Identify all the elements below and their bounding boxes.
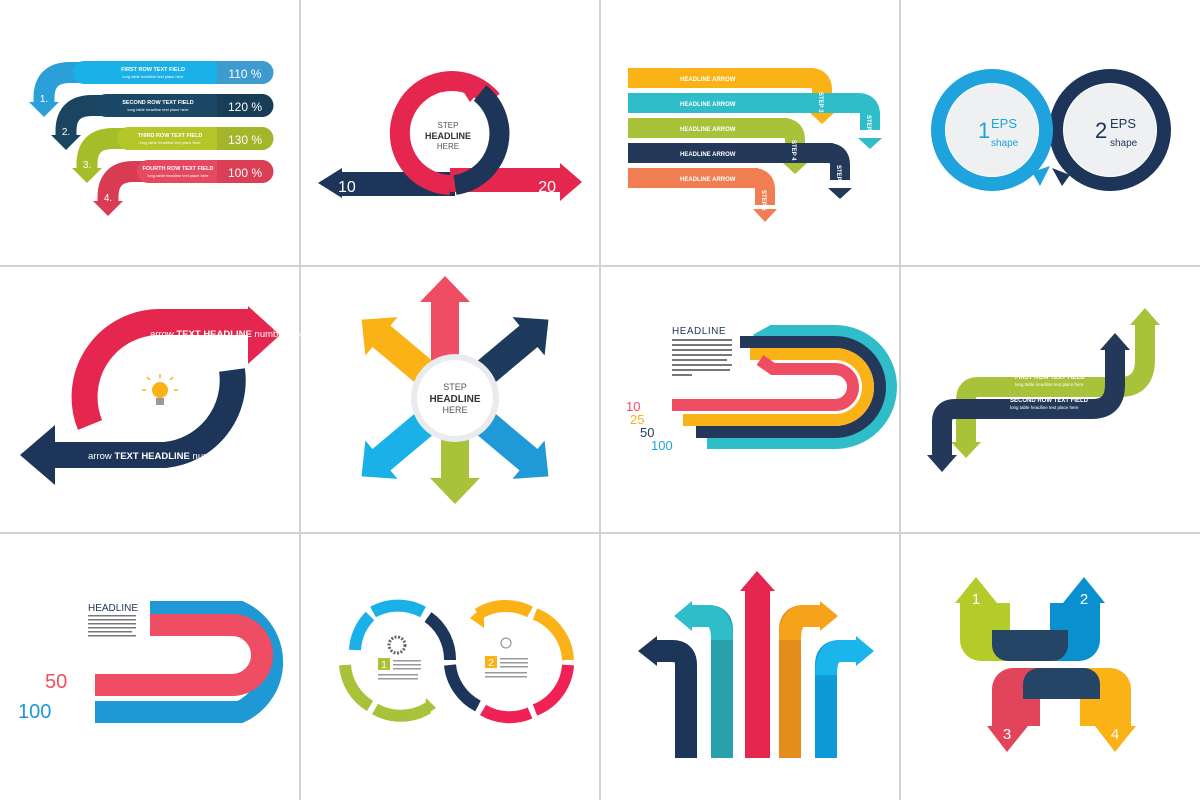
panel: nested U arrows with headline [626,326,891,453]
panel: headline arrows with steps: STEP 1 [865,115,871,136]
row 1: 1. [40,94,48,105]
panel: radial arrows: HEADLINE [429,394,481,405]
panel: two circles EPS: shape [991,138,1019,149]
arrow bar teal [628,93,882,149]
panel: four numbered U arrows [955,577,1136,752]
row 4 [93,160,274,216]
row 4: 4. [104,193,112,204]
panel: four numbered U arrows: 4 [1111,726,1119,743]
panel: single U arrow with headline: 50 [45,671,67,693]
panel: infinity segmented circles: 1 [381,660,387,671]
panel: infinity segmented circles: 2 [488,658,494,669]
panel: two circles EPS: shape [1110,138,1138,149]
panel: headline arrows with steps: STEP 2 [835,165,841,186]
arrow bar orange [628,168,777,222]
panel: four numbered U arrows: 2 [1080,591,1088,608]
panel: four numbered U arrows: 1 [972,591,980,608]
icon: bulb small [501,638,511,648]
panel: vertical branching arrows [638,571,874,758]
panel: loop arrow 10/20: 10 [338,179,356,196]
panel: four row curl arrows [29,61,274,216]
panel: two circles EPS: EPS [991,116,1017,131]
arrow bar yellow: HEADLINE ARROW [680,77,736,83]
panel: single U arrow with headline [18,603,272,723]
panel: loop arrow 10/20: STEP [438,121,458,130]
panel: two circles EPS [938,76,1164,186]
panel: headline arrows with steps: STEP 3 [817,92,823,113]
row 3: 130 % [228,133,262,147]
icon: gear [389,637,405,653]
arrow bar yellow [628,68,834,124]
panel: S arrows up and down: long table headline text place here [1010,405,1079,410]
panel: S arrows up and down: SECOND ROW TEXT FIELD [1010,398,1089,404]
row 3: THIRD ROW TEXT FIELD [138,133,202,139]
icon: bulb [142,374,178,405]
panel: single U arrow with headline: 100 [18,701,51,723]
row 3: long table headline text place here [140,140,201,145]
arrow bar orange: HEADLINE ARROW [680,177,736,183]
panel: radial arrows: STEP [443,382,467,392]
row 2 [51,94,274,150]
row 2: long table headline text place here [128,107,189,112]
arrow bar teal: HEADLINE ARROW [680,102,736,108]
panel: headline arrows with steps [628,68,882,222]
panel: two circles EPS: 2 [1095,118,1107,143]
panel: S arrows up and down [927,308,1160,472]
panel: nested U arrows with headline: 25 [630,412,644,427]
panel: radial arrows [345,276,565,504]
panel: S arrow with bulb: arrow TEXT HEADLINE number two [88,451,242,462]
row 1 [29,61,274,117]
panel: S arrow with bulb [20,306,305,485]
panel: infinity segmented circles [345,606,568,717]
panel: headline arrows with steps: STEP 4 [790,140,796,161]
row 3 [72,127,274,183]
panel: loop arrow 10/20: HEADLINE [425,131,471,141]
panel: nested U arrows with headline: 50 [640,425,654,440]
panel: headline arrows with steps: STEP 5 [760,190,766,211]
panel: two circles EPS: EPS [1110,116,1136,131]
row 3: 3. [83,160,91,171]
panel: S arrows up and down: FIRST ROW TEXT FIELD [1015,375,1085,381]
row 2: SECOND ROW TEXT FIELD [122,100,194,106]
panel: loop arrow 10/20: 20 [538,179,556,196]
row 4: long table headline text place here [148,173,209,178]
panel: single U arrow with headline: HEADLINE [88,603,138,614]
panel: nested U arrows with headline: HEADLINE [672,326,726,337]
panel: radial arrows: HERE [442,405,468,415]
panel: nested U arrows with headline: 100 [651,438,673,453]
row 1: FIRST ROW TEXT FIELD [121,67,185,73]
panel: two circles EPS: 1 [978,118,990,143]
arrow bar navy [628,143,852,199]
row 4: 100 % [228,166,262,180]
arrow bar lime: HEADLINE ARROW [680,127,736,133]
panel: loop arrow 10/20 [318,80,582,201]
panel: S arrow with bulb: arrow TEXT HEADLINE number one [150,329,305,340]
panel: loop arrow 10/20: HERE [437,142,459,151]
row 2: 120 % [228,100,262,114]
row 1: long table headline text place here [123,74,184,79]
row 1: 110 % [228,67,262,81]
row 2: 2. [62,127,70,138]
row 4: FOURTH ROW TEXT FIELD [143,166,213,172]
arrow bar navy: HEADLINE ARROW [680,152,736,158]
panel: four numbered U arrows: 3 [1003,726,1011,743]
arrow bar lime [628,118,807,174]
panel: nested U arrows with headline: 10 [626,399,640,414]
panel: S arrows up and down: long table headline text place here [1015,382,1084,387]
